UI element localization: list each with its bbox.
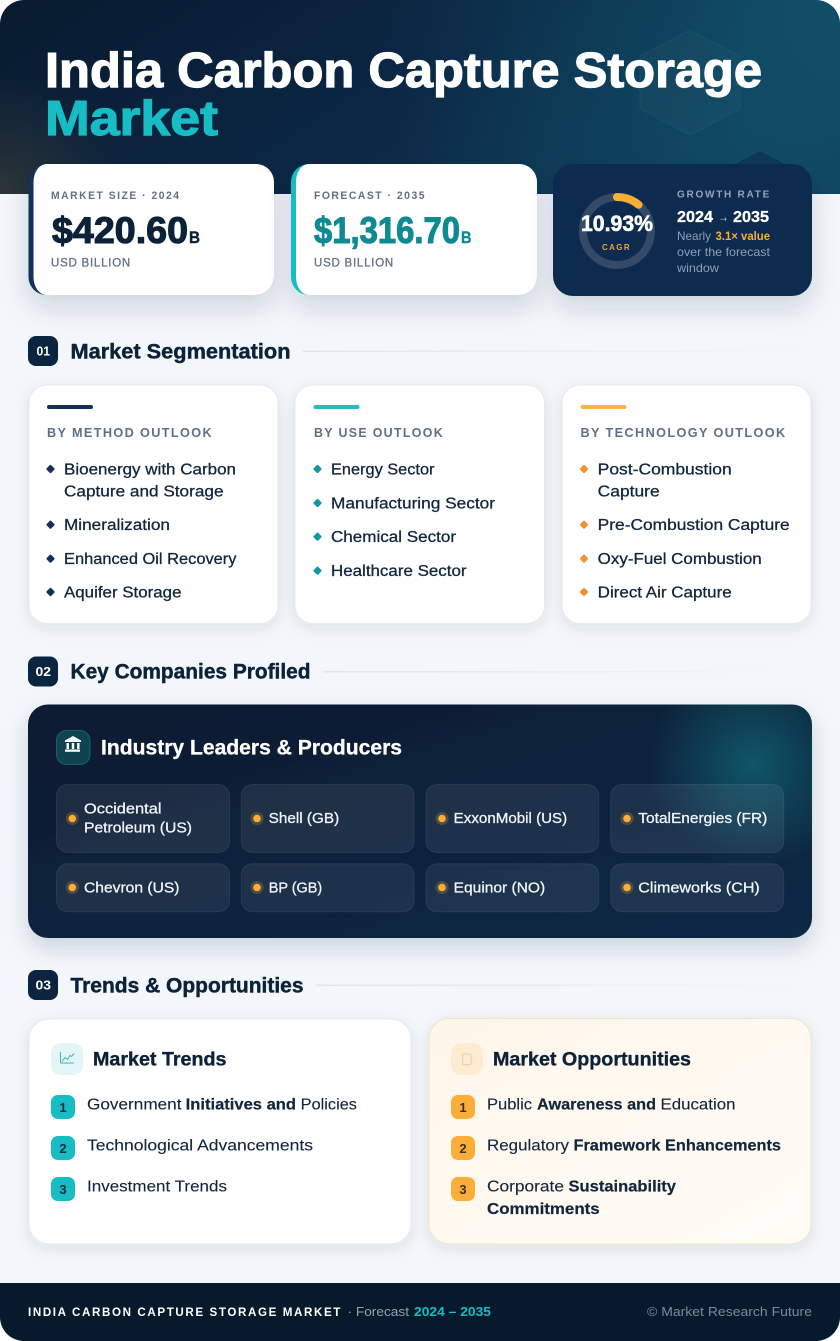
list item: government initiatives: Government xyxy=(87,1097,182,1114)
list item: corporate sustainability: Sustainability xyxy=(568,1179,676,1196)
company chips: Climeworks (CH) xyxy=(638,880,760,896)
list: use items: Energy Sector xyxy=(331,462,434,479)
section heading: market segmentation: 01 xyxy=(36,344,50,358)
growth rate details: 2035 xyxy=(733,209,769,226)
list: method items: Enhanced Oil Recovery xyxy=(64,551,237,568)
list item: technological advancements: Technological Advancements xyxy=(87,1138,313,1155)
list item: regulatory framework: Regulatory xyxy=(487,1138,569,1155)
list: method items: Capture and Storage xyxy=(64,484,224,501)
list item: technological advancements xyxy=(51,1136,313,1160)
icon: decorative small hexagon xyxy=(734,150,786,164)
title: India Carbon Capture Storage xyxy=(45,44,762,98)
list: technology items: Direct Air Capture xyxy=(598,584,732,602)
footer xyxy=(0,1283,840,1341)
title: Market xyxy=(45,92,218,146)
growth rate details: 3.1× value xyxy=(716,229,770,243)
list item: technological advancements: 2 xyxy=(59,1141,67,1156)
list: technology items: Pre-Combustion Capture xyxy=(598,517,790,534)
company chips: Equinor (NO) xyxy=(454,880,545,896)
footer title: 2024 – 2035 xyxy=(414,1305,491,1319)
list: technology items xyxy=(579,462,790,602)
company chips: Petroleum (US) xyxy=(84,821,192,837)
label: market size: MARKET SIZE · 2024 xyxy=(51,190,180,202)
unit label: USD BILLION xyxy=(314,256,394,270)
list: use items xyxy=(313,462,495,580)
company chips: Occidental xyxy=(84,802,162,818)
list: use items: Healthcare Sector xyxy=(331,563,466,580)
heading: method: BY METHOD OUTLOOK xyxy=(47,425,213,440)
list item: corporate sustainability: Commitments xyxy=(487,1201,600,1218)
heading: market opportunities: Market Opportunities xyxy=(493,1048,691,1070)
company chips: Shell (GB) xyxy=(269,811,339,827)
panel: by method outlook xyxy=(29,385,278,624)
section heading: key companies: 02 xyxy=(36,665,51,679)
list item: corporate sustainability: Corporate xyxy=(487,1179,564,1196)
list item: regulatory framework xyxy=(451,1136,781,1160)
label: forecast: FORECAST · 2035 xyxy=(314,190,426,202)
growth rate details: window xyxy=(676,261,719,275)
list item: government initiatives xyxy=(51,1095,357,1119)
list item: corporate sustainability: 3 xyxy=(459,1182,467,1197)
copyright: © Market Research Future xyxy=(647,1305,812,1319)
list: technology items: Oxy-Fuel Combustion xyxy=(598,551,762,568)
list item: government initiatives: 1 xyxy=(59,1100,67,1115)
heading: use: BY USE OUTLOOK xyxy=(314,425,444,440)
section heading: key companies: Key Companies Profiled xyxy=(70,660,310,684)
donut chart: CAGR xyxy=(581,197,653,265)
list item: public awareness: Awareness and xyxy=(537,1097,656,1114)
growth rate details: → xyxy=(718,207,728,226)
panel: market opportunities xyxy=(429,1018,811,1244)
panel: by technology outlook xyxy=(562,385,811,624)
section heading: key companies xyxy=(28,656,614,686)
stat card: growth rate xyxy=(553,164,812,296)
value: 1316.70 billion: $1,316.70 xyxy=(314,210,460,251)
company chips: TotalEnergies (FR) xyxy=(638,811,767,827)
list: use items: Chemical Sector xyxy=(331,529,456,546)
list item: government initiatives: Policies xyxy=(301,1097,357,1114)
growth rate details: over the forecast xyxy=(677,245,771,259)
list item: corporate sustainability xyxy=(451,1177,676,1218)
footer title: · Forecast xyxy=(348,1305,410,1319)
footer title xyxy=(28,1305,491,1319)
company chips: ExxonMobil (US) xyxy=(454,811,567,827)
list: technology items: Capture xyxy=(598,484,660,501)
heading: market trends: Market Trends xyxy=(93,1048,227,1070)
list: method items: Aquifer Storage xyxy=(64,584,182,602)
growth rate details: 2024 xyxy=(677,209,713,226)
list: technology items: Post-Combustion xyxy=(598,462,732,479)
list item: investment trends: 3 xyxy=(59,1182,67,1197)
donut chart: CAGR: 10.93% xyxy=(581,211,653,236)
list: method items: Mineralization xyxy=(64,517,170,534)
list item: government initiatives: Initiatives and xyxy=(186,1097,296,1114)
value: 420.60 billion: $420.60 xyxy=(52,210,188,251)
growth rate details xyxy=(676,188,771,275)
growth rate details: GROWTH RATE xyxy=(677,188,771,200)
icon: decorative large hexagon xyxy=(640,30,740,135)
value: 420.60 billion: B xyxy=(189,228,200,247)
company chips xyxy=(56,784,784,912)
list: method items xyxy=(46,462,237,602)
icon: line chart xyxy=(51,1043,83,1075)
panel: industry leaders xyxy=(28,704,812,938)
heading: industry leaders: Industry Leaders & Producers xyxy=(101,736,402,760)
section heading: market segmentation: Market Segmentation xyxy=(70,340,290,364)
section heading: trends and opportunities: 03 xyxy=(36,978,51,992)
growth rate details: Nearly xyxy=(677,229,711,243)
list item: public awareness: Education xyxy=(660,1097,736,1114)
company chips: BP (GB) xyxy=(269,880,322,896)
list item: regulatory framework: 2 xyxy=(459,1141,467,1156)
list: method items: Bioenergy with Carbon xyxy=(64,462,236,479)
list: use items: Manufacturing Sector xyxy=(331,496,495,512)
value: 1316.70 billion: B xyxy=(461,228,472,247)
donut chart: CAGR: CAGR xyxy=(602,242,631,252)
header banner xyxy=(0,0,840,194)
icon: missing glyph box xyxy=(451,1043,483,1075)
stat card: forecast 2035 xyxy=(291,164,537,295)
list item: regulatory framework: Framework Enhancements xyxy=(574,1138,781,1155)
unit label: USD BILLION xyxy=(51,256,131,270)
list item: public awareness xyxy=(451,1095,736,1119)
panel: by use outlook xyxy=(295,385,544,624)
company chips: Chevron (US) xyxy=(84,880,180,896)
section heading: trends and opportunities xyxy=(28,970,612,1000)
list item: public awareness: Public xyxy=(487,1097,532,1114)
heading: technology: BY TECHNOLOGY OUTLOOK xyxy=(580,425,786,440)
footer title: INDIA CARBON CAPTURE STORAGE MARKET xyxy=(28,1307,342,1319)
stat card: market size 2024 xyxy=(28,164,274,295)
icon: bank xyxy=(56,730,90,764)
title xyxy=(48,50,761,136)
list item: investment trends: Investment Trends xyxy=(87,1179,227,1196)
list item: public awareness: 1 xyxy=(459,1100,467,1115)
list item: investment trends xyxy=(51,1177,227,1201)
panel: market trends xyxy=(29,1019,411,1244)
section heading: trends and opportunities: Trends & Opportunities xyxy=(70,974,304,998)
section heading: market segmentation xyxy=(28,336,606,366)
